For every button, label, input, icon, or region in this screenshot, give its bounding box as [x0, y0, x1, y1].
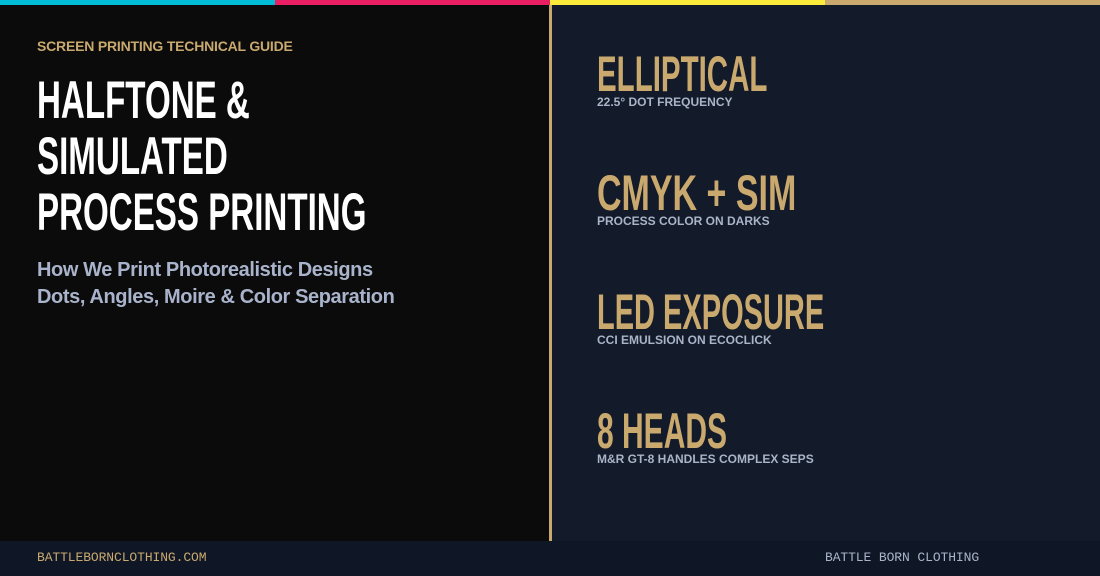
- stat: cmyk: CMYK + SIM: [597, 165, 796, 221]
- subtitle: How We Print Photorealistic Designs: [37, 259, 373, 281]
- stat: led exposure: LED EXPOSURE: [597, 284, 824, 340]
- title: PROCESS PRINTING: [37, 183, 366, 242]
- title: [37, 71, 366, 242]
- stat: elliptical: 22.5° DOT FREQUENCY: [597, 95, 732, 109]
- divider line gold: [549, 5, 552, 541]
- footer: [0, 541, 1100, 576]
- stat: 8 heads: 8 HEADS: [597, 403, 727, 459]
- panel: left intro: [0, 5, 549, 541]
- subtitle: Dots, Angles, Moire & Color Separation: [37, 286, 394, 308]
- stat: led exposure: CCI EMULSION ON ECOCLICK: [597, 333, 772, 347]
- subtitle: [37, 259, 394, 308]
- eyebrow label: SCREEN PRINTING TECHNICAL GUIDE: [37, 38, 293, 54]
- footer brand: BATTLE BORN CLOTHING: [825, 550, 979, 565]
- title: HALFTONE &: [37, 71, 250, 130]
- stat: 8 heads: M&R GT-8 HANDLES COMPLEX SEPS: [597, 452, 814, 466]
- panel: right stats: [552, 5, 1100, 541]
- top color bar: [0, 0, 1100, 5]
- stat: 8 heads: [597, 403, 814, 466]
- stat: cmyk: PROCESS COLOR ON DARKS: [597, 214, 770, 228]
- title: SIMULATED: [37, 127, 228, 186]
- stat: elliptical: ELLIPTICAL: [597, 46, 767, 102]
- footer url: BATTLEBORNCLOTHING.COM: [37, 550, 206, 565]
